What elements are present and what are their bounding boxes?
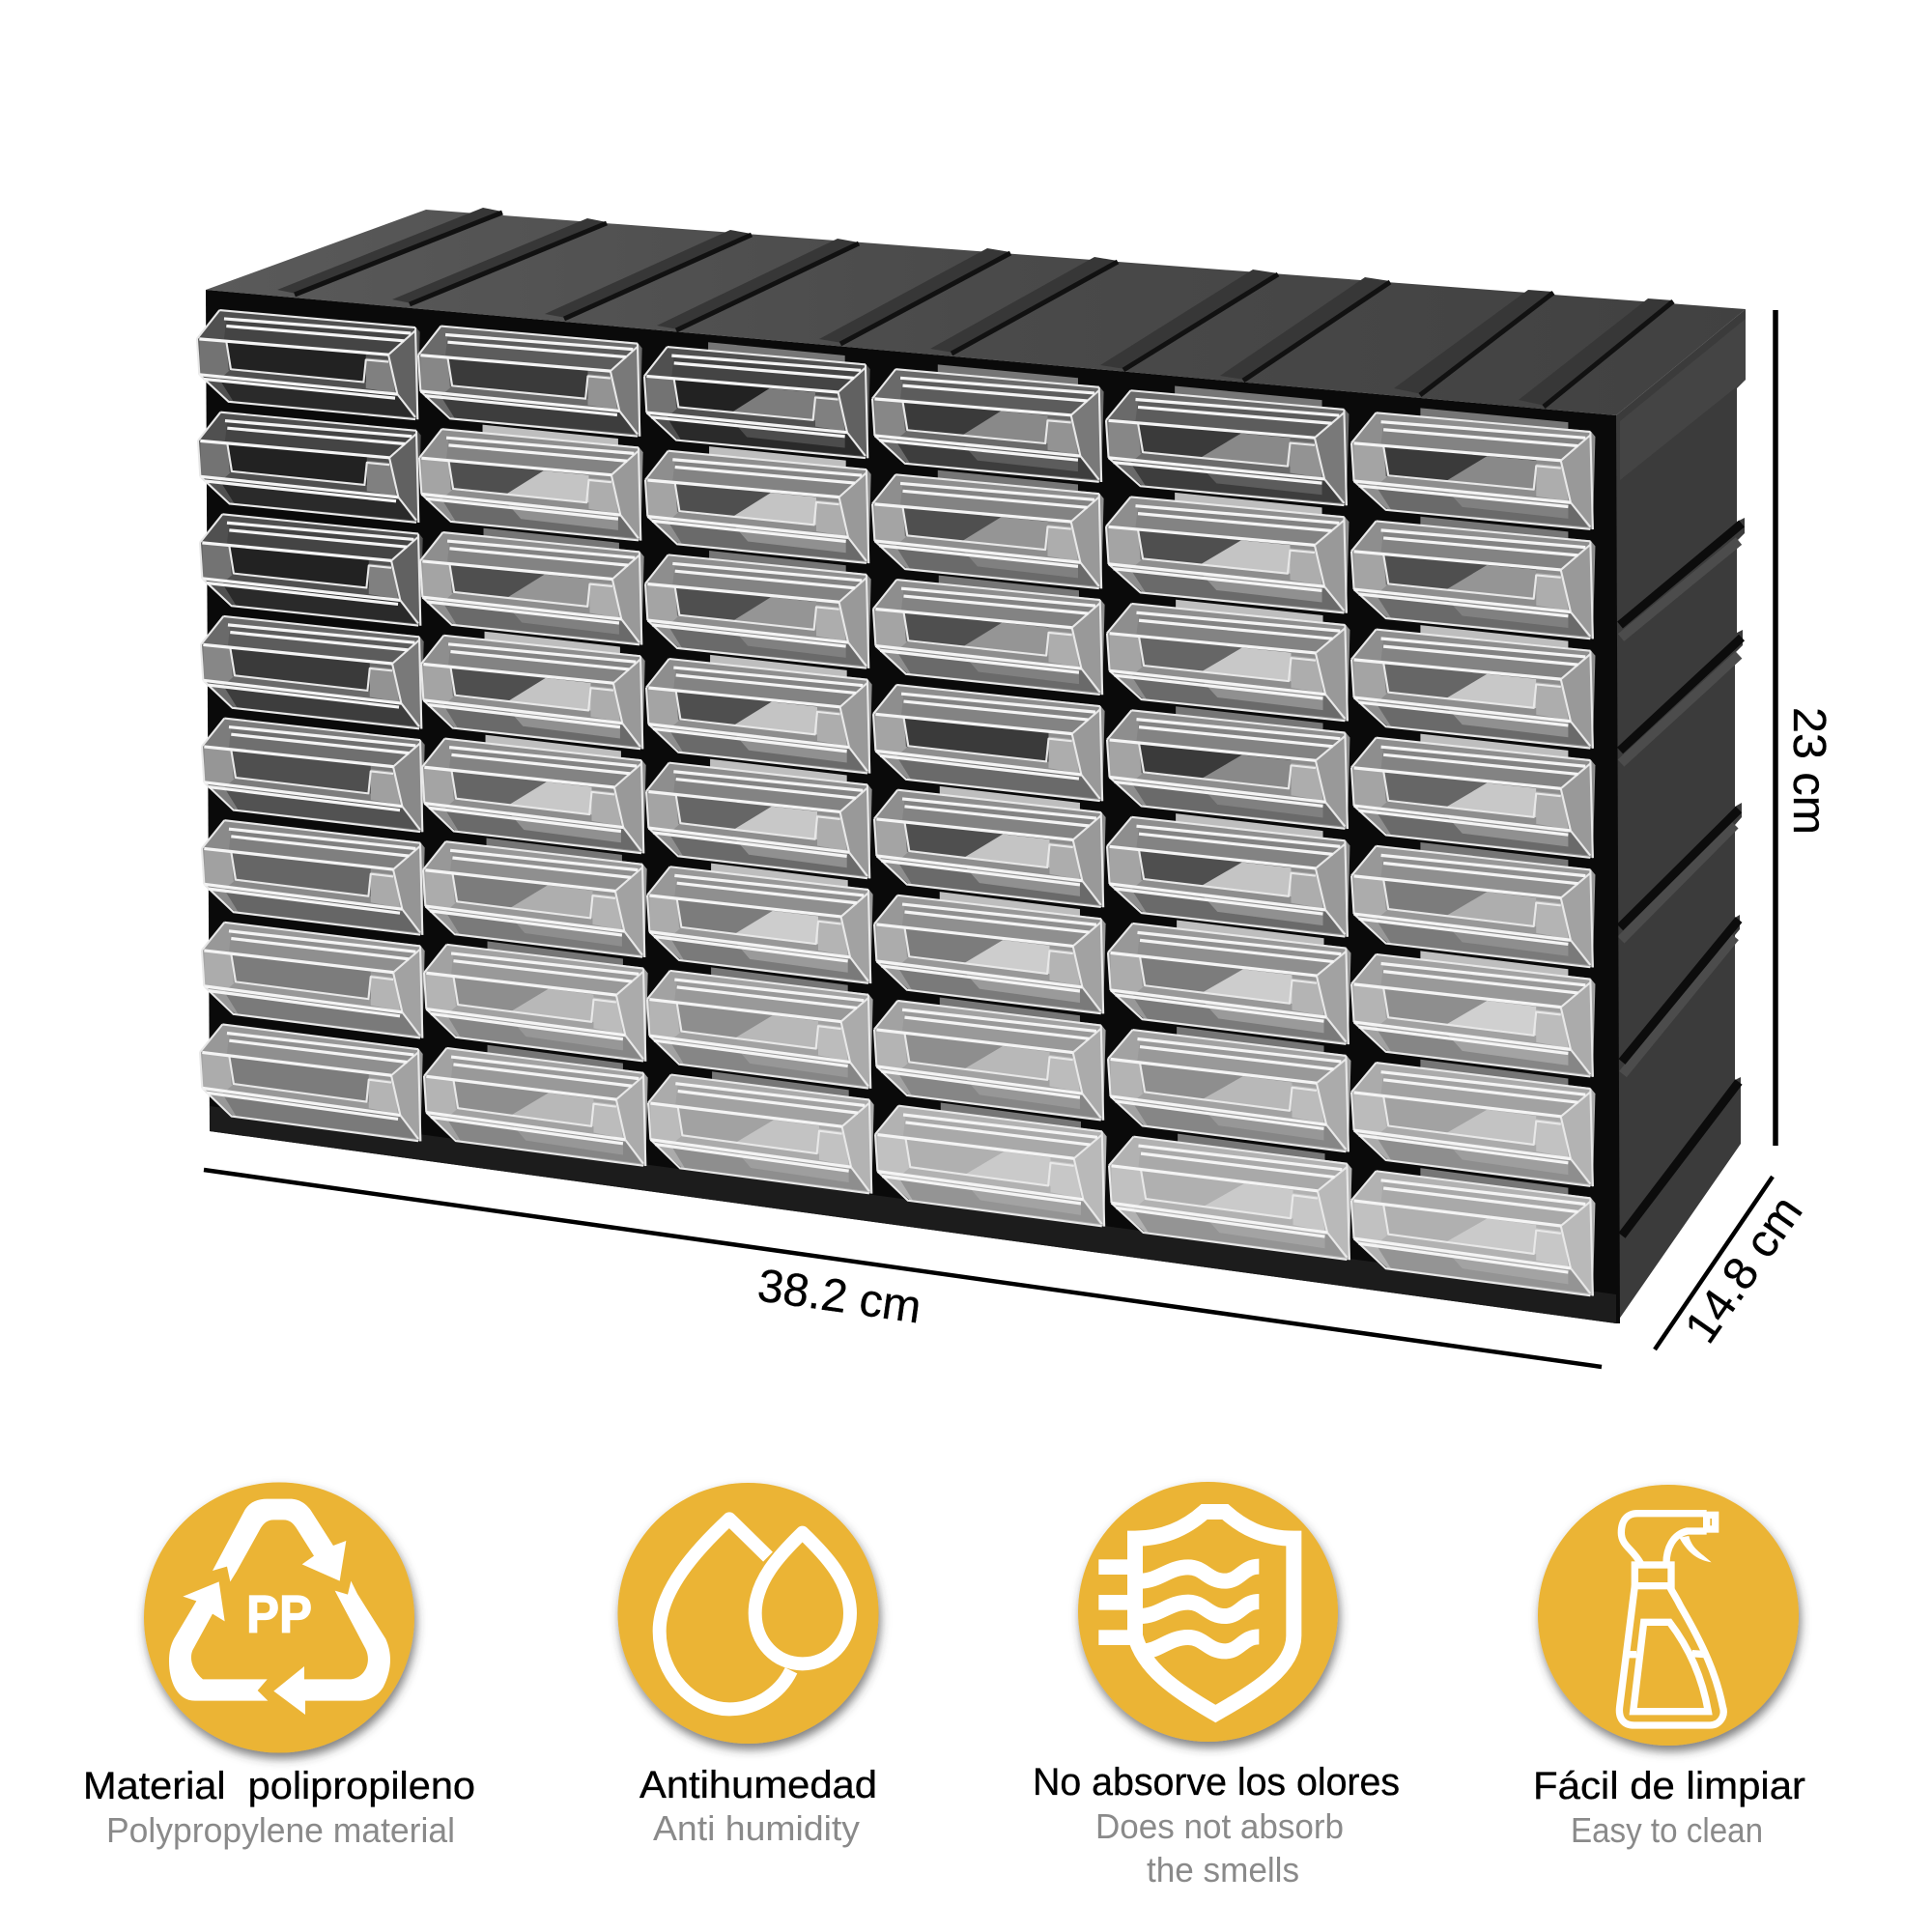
label: English: Polypropylene material — [106, 1810, 455, 1850]
icon: recycling PP badge — [144, 1482, 414, 1752]
icon: spray bottle — [1538, 1485, 1799, 1746]
label: Spanish: Material polipropileno — [83, 1765, 475, 1807]
label: English second line: the smells — [1147, 1850, 1299, 1889]
icon: shield with waves — [1078, 1482, 1338, 1742]
dimension: width line and label: 38.2 cm — [754, 1260, 924, 1334]
drawer column 3 — [644, 336, 874, 1194]
drawer grid: 6 columns by 8 rows — [197, 300, 1595, 1296]
label: English: Easy to clean — [1571, 1810, 1763, 1850]
drawer column 6 — [1351, 402, 1595, 1296]
feature: does not absorb smells — [1033, 1482, 1400, 1889]
label: Spanish: Fácil de limpiar — [1533, 1765, 1805, 1807]
feature: easy to clean — [1533, 1485, 1805, 1850]
icon: recycling PP badge: PP — [246, 1584, 312, 1644]
cabinet front frame — [206, 290, 1620, 1323]
label: English: Does not absorb — [1095, 1806, 1344, 1846]
drawer column 5 — [1106, 380, 1351, 1261]
label: English: Anti humidity — [653, 1808, 860, 1848]
label: Spanish: Antihumedad — [639, 1764, 877, 1806]
dimension: depth line and label: 14.8 cm — [1675, 1187, 1812, 1352]
dimension: width line and label — [204, 1170, 1602, 1367]
drawer column 2 — [418, 316, 648, 1166]
feature: polypropylene material — [83, 1482, 475, 1850]
feature: anti humidity — [618, 1483, 879, 1848]
dimension: height line and label: 23 cm — [1783, 707, 1834, 835]
top ridges — [277, 208, 1673, 407]
product: drawer cabinet — [197, 208, 1746, 1323]
drawer column 1 — [197, 300, 425, 1142]
drawer column 4 — [872, 358, 1107, 1227]
label: Spanish: No absorve los olores — [1033, 1761, 1400, 1804]
cabinet right side panel — [1616, 309, 1746, 1323]
cabinet top surface — [206, 210, 1746, 415]
icon: water drops — [618, 1483, 879, 1744]
bottom frame bar — [210, 1106, 1616, 1323]
